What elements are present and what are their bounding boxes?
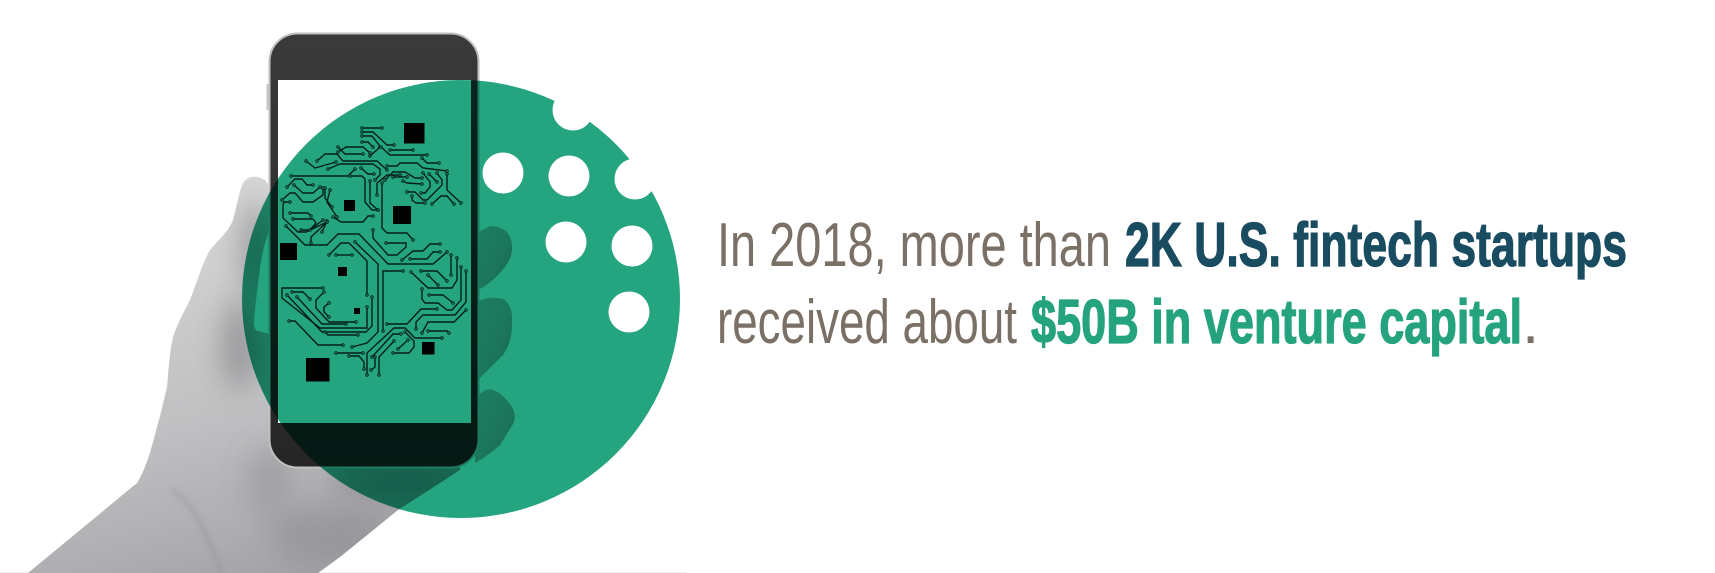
circuit dollar sign <box>280 123 466 382</box>
phone screen <box>278 80 471 423</box>
phone side button <box>266 84 269 110</box>
phone <box>266 34 478 468</box>
white dots <box>482 90 656 332</box>
phone body <box>270 34 478 468</box>
circuit traces <box>282 128 466 375</box>
circuit chips <box>280 123 434 382</box>
line 2 intro: received about <box>717 288 1017 357</box>
hand and wrist <box>28 177 470 573</box>
headline <box>717 211 1627 357</box>
line 2 highlight: $50B in venture capital <box>1031 288 1522 357</box>
green circle <box>242 80 680 518</box>
bottom hairline <box>0 572 687 573</box>
fingers <box>475 226 515 463</box>
hand holding phone <box>28 177 515 573</box>
line 2 period: . <box>1522 288 1539 357</box>
line 1 intro: In 2018, more than <box>717 211 1111 280</box>
